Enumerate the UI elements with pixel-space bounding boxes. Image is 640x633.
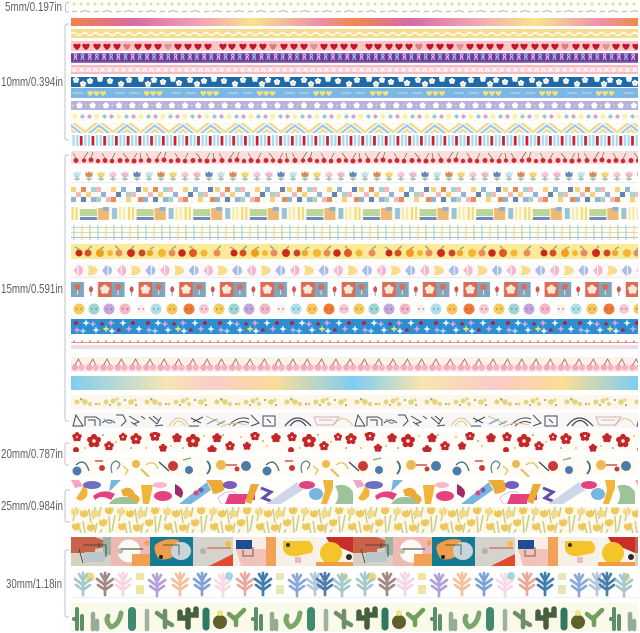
tape strip: coral lines — [71, 338, 638, 351]
tape strip: chevrons — [71, 123, 638, 133]
tape strip: pastel gradient — [71, 376, 638, 390]
tape strip: fruit on yellow — [71, 244, 638, 259]
tape strip: pink cherries — [71, 357, 638, 372]
tape strip: yellow scallop — [71, 29, 638, 38]
tape strip: red flowers — [71, 432, 638, 452]
tape strip: colour blocks — [71, 207, 638, 220]
tape strip: coral and teal squares — [71, 282, 638, 297]
label: 20mm width: 20mm/0.787in — [1, 446, 63, 461]
tape strip: sunset gradient — [71, 18, 638, 26]
tape strip: checker tiles — [71, 187, 638, 203]
tape strip: pastel fish — [71, 263, 638, 278]
tape strip: cut-out leaves — [71, 570, 638, 598]
tape strip: grey dashes — [71, 9, 638, 14]
tape strip: plaid grid — [71, 225, 638, 240]
tape strip: line doodles — [71, 413, 638, 428]
bracket: 10mm group — [65, 24, 69, 140]
tape strip: red hearts — [71, 41, 638, 51]
tape strip: yellow tulips — [71, 507, 638, 533]
tape strip: purple ribbons — [71, 53, 638, 63]
label: 25mm width: 25mm/0.984in — [1, 498, 63, 513]
label: 10mm width: 10mm/0.394in — [1, 74, 63, 89]
tape strip: pink ribbons — [71, 65, 638, 74]
tape strip: blue and red stripes — [71, 135, 638, 146]
tape strip: yellow sprigs — [71, 395, 638, 409]
tape strip: pastel diamonds — [71, 112, 638, 121]
tape strip: cacti — [71, 603, 638, 632]
label: 30mm width: 30mm/1.18in — [6, 576, 62, 591]
bracket: 25mm group — [65, 490, 70, 522]
tape strip: red cherries — [71, 151, 638, 164]
label: 15mm width: 15mm/0.591in — [1, 281, 63, 296]
tape strip: blue with stars — [71, 319, 638, 334]
bracket: 15mm group — [65, 155, 69, 421]
bracket: 20mm group — [65, 443, 69, 465]
tape strip: round faces — [71, 302, 638, 317]
tape strip: colourful blobs — [71, 480, 638, 504]
tape strip: swirls and dots — [71, 457, 638, 477]
tape strip: lavender florets — [71, 101, 638, 110]
bracket: 5mm group — [66, 2, 69, 12]
tape strip: blue with white flowers — [71, 77, 638, 87]
tape strip: abstract faces — [71, 537, 638, 566]
tape strip: tulips — [71, 170, 638, 183]
tape strip: light blue with yellow hearts — [71, 88, 638, 98]
tape strip: yellow dots — [71, 2, 638, 7]
bracket: 30mm group — [65, 550, 69, 617]
